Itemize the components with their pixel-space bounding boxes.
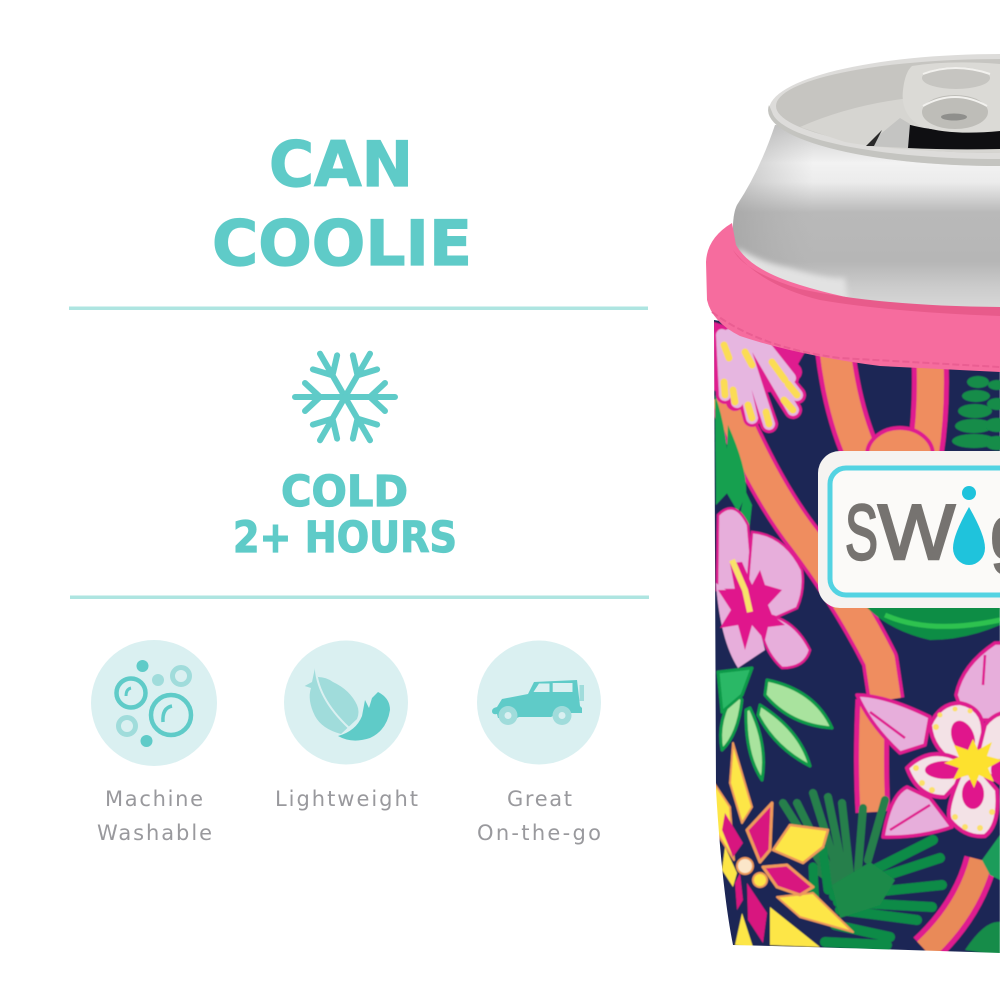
photo: pink collar [706,223,1000,372]
label: great on-the-go: Great [507,787,572,811]
heading: cold 2+ hours: 2+ HOURS [233,513,457,563]
icon: great on-the-go jeep [477,640,601,764]
left green leaves [715,395,752,532]
fern top right [952,376,1000,450]
top pink flower [714,322,805,424]
can rim [769,54,1000,166]
logo badge [818,451,1000,608]
can opening [907,124,1000,149]
hibiscus flower [716,508,810,668]
title: CAN [269,128,413,201]
label: machine washable: Washable [97,821,212,845]
can tab [903,62,1000,133]
label: great on-the-go [477,787,601,845]
title [212,128,472,280]
photo: coolie sleeve pattern [700,310,1000,960]
label: lightweight: Lightweight [275,787,418,811]
logo wordmark: S [845,488,878,576]
label: machine washable [97,787,212,845]
can body [733,125,1000,315]
branches [725,350,981,950]
icon: lightweight feather [284,640,408,764]
pink bracts [857,643,1000,837]
label: great on-the-go: On-the-go [477,821,601,845]
icon: snowflake [295,347,395,447]
photo: can [733,54,1000,315]
big flower [907,703,1000,836]
green leaf under badge [866,608,1000,641]
logo wordmark: W [878,488,955,576]
bottom right greens [965,922,1000,955]
label: machine washable: Machine [105,787,203,811]
palm leaves under hibiscus [718,668,832,780]
title: COOLIE [212,207,472,280]
heading: cold 2+ hours [233,467,457,563]
logo wordmark [846,503,956,562]
star flower [714,743,853,947]
logo drop [953,486,985,565]
heading: cold 2+ hours: COLD [281,467,408,517]
icon: machine washable [91,640,217,766]
bottom palm frond [783,793,942,945]
